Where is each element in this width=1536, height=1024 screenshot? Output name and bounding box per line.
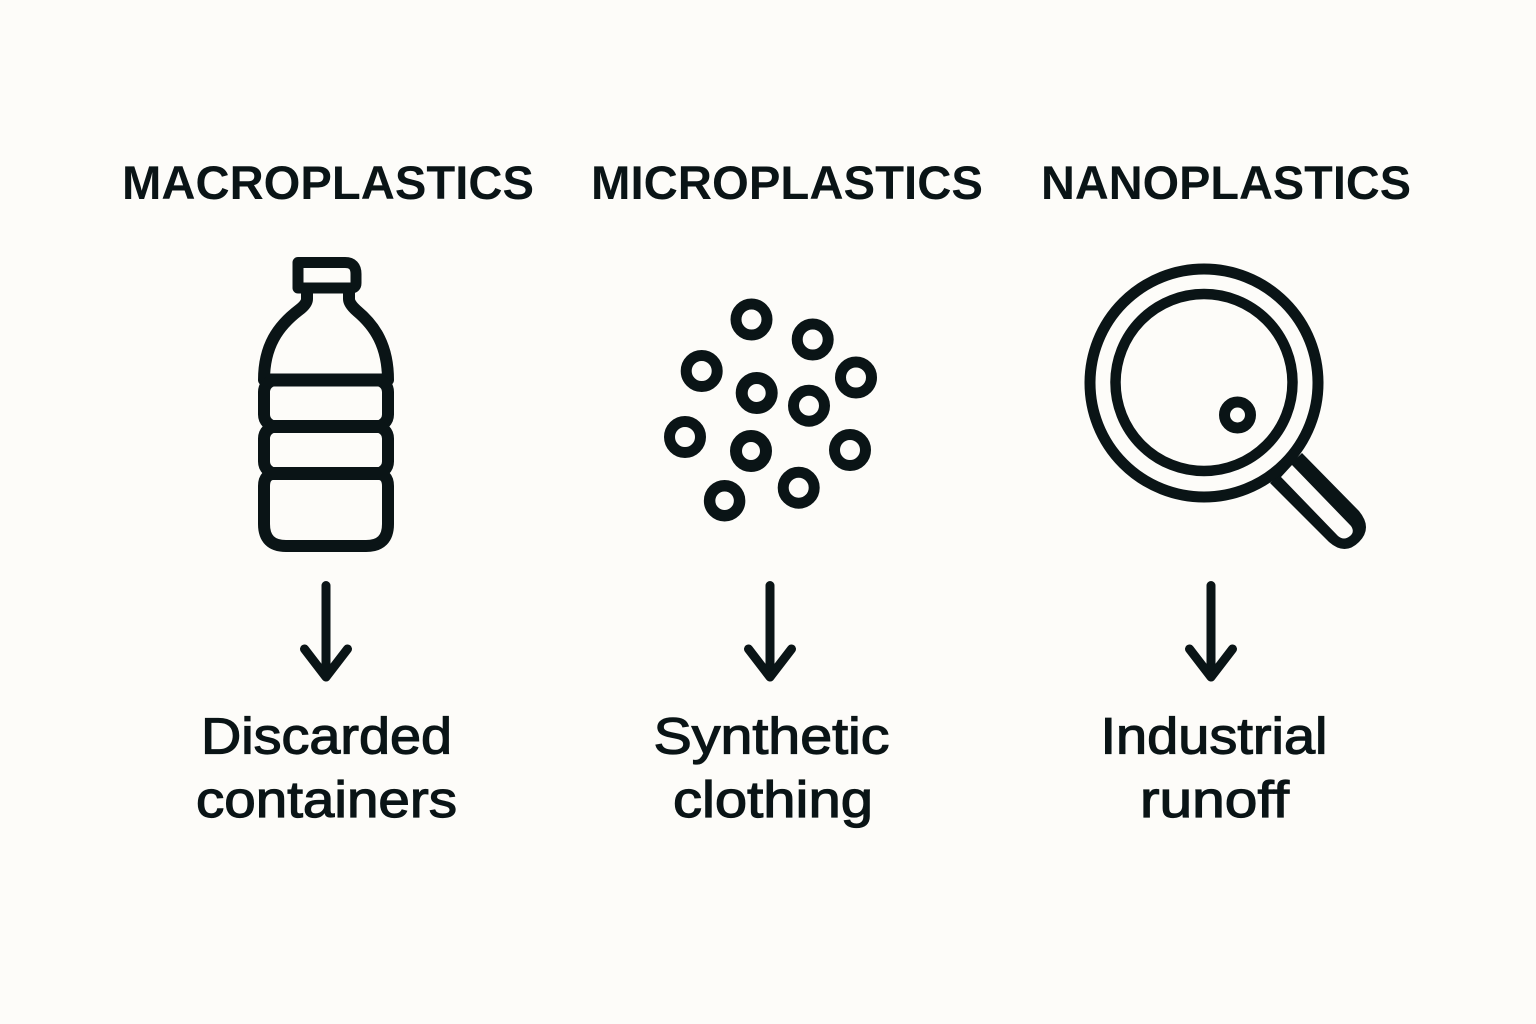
label: industrial runoff: runoff: [1140, 771, 1290, 828]
arrow: microplastics: [748, 586, 792, 677]
label: synthetic clothing: clothing: [673, 771, 873, 828]
label: discarded containers: Discarded: [201, 708, 452, 764]
label: synthetic clothing: [654, 708, 890, 828]
heading: macroplastics: MACROPLASTICS: [122, 156, 534, 209]
icon: plastic bottle: [264, 262, 388, 546]
label: industrial runoff: Industrial: [1100, 708, 1328, 764]
label: synthetic clothing: Synthetic: [654, 708, 890, 764]
heading: nanoplastics: NANOPLASTICS: [1041, 156, 1411, 209]
arrow: nanoplastics: [1190, 586, 1232, 677]
label: discarded containers: [196, 708, 457, 828]
heading: microplastics: MICROPLASTICS: [591, 156, 983, 209]
icon: microplastic particles: [670, 304, 872, 516]
label: discarded containers: containers: [196, 771, 457, 828]
label: industrial runoff: [1100, 708, 1328, 828]
icon: magnifying glass: [1090, 269, 1366, 549]
arrow: macroplastics: [304, 586, 348, 677]
